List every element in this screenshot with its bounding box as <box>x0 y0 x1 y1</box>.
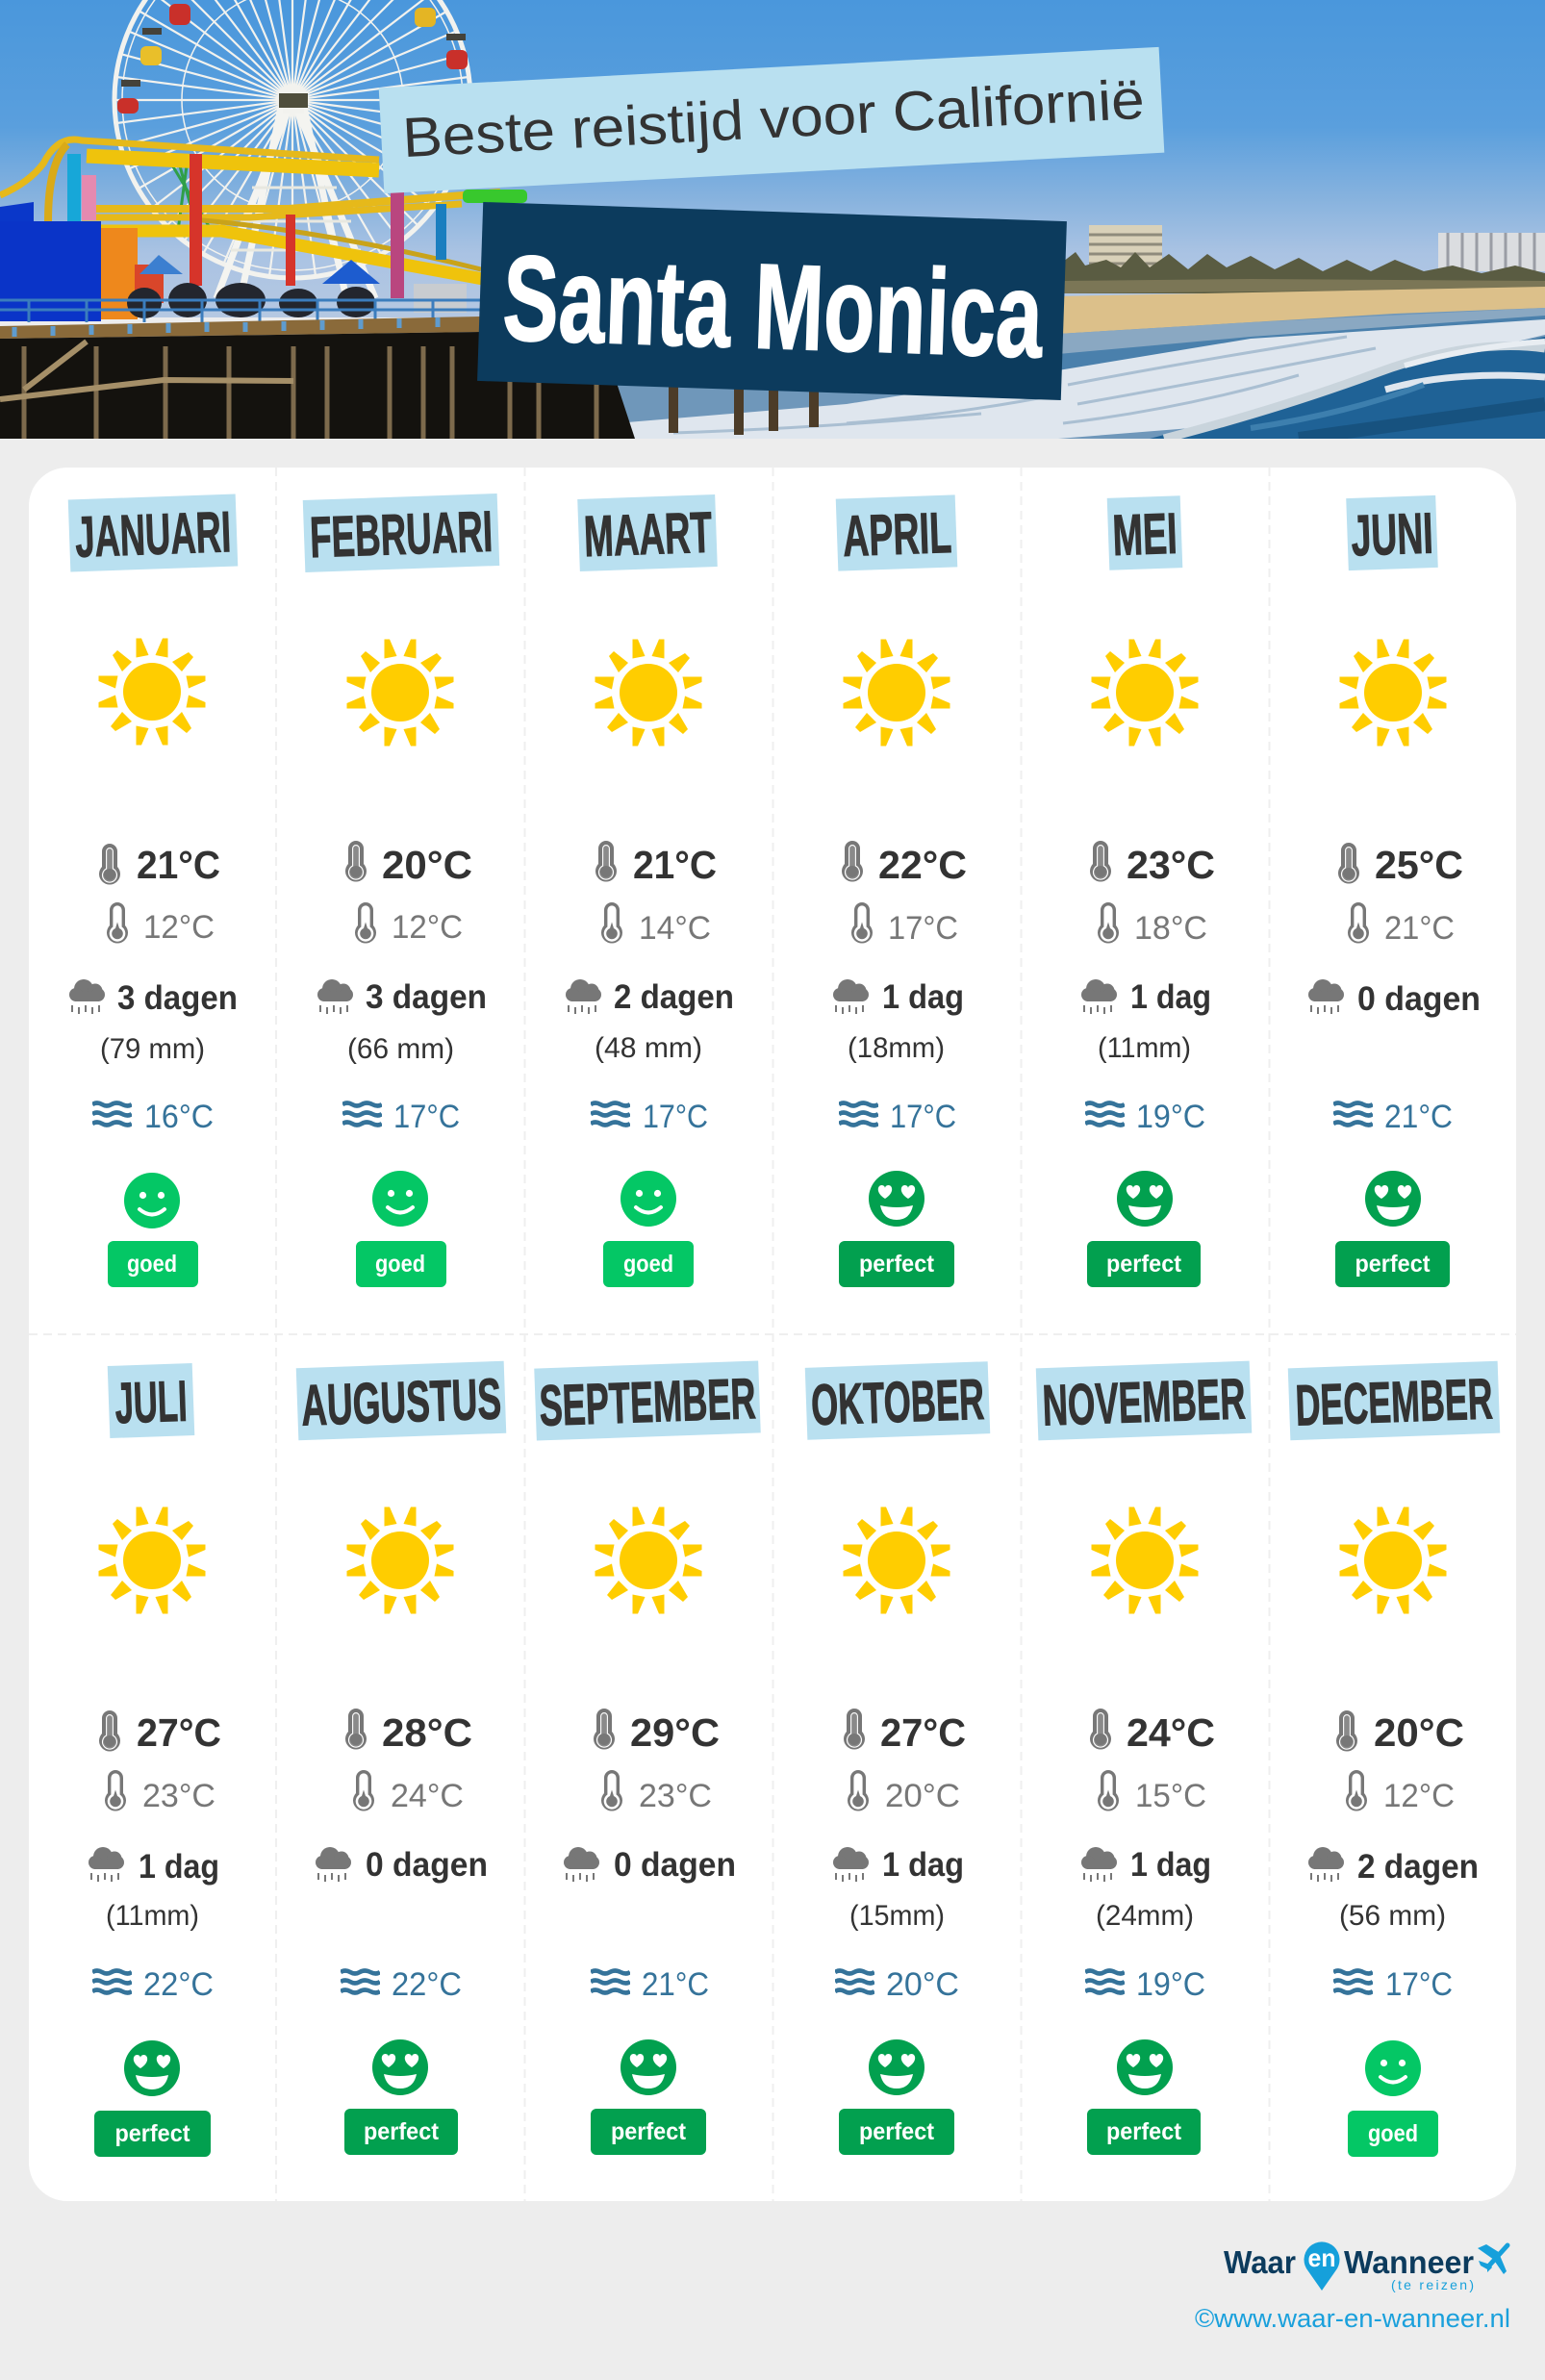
water temperature: 16°C <box>144 1099 214 1135</box>
rating badge: perfect <box>859 2118 935 2145</box>
month label: NOVEMBER <box>1041 1366 1247 1438</box>
max temperature: 20°C <box>382 843 472 887</box>
water temperature: 19°C <box>1136 1099 1205 1135</box>
month label <box>1107 495 1182 570</box>
month label: MEI <box>1111 501 1178 568</box>
min temperature: 12°C <box>392 909 463 946</box>
rating badge: goed <box>127 1251 177 1278</box>
rain days: 1 dag <box>882 1846 964 1884</box>
column: mei <box>1081 495 1215 1287</box>
header photo: Santa Monica pier and beach <box>0 0 1545 439</box>
column: februari <box>303 494 499 1287</box>
icon: sun <box>1339 1506 1447 1614</box>
rating badge <box>344 2109 458 2155</box>
icon: waves <box>92 1102 132 1126</box>
water temperature: 22°C <box>392 1966 462 2003</box>
icon: thermometer high <box>1338 843 1359 884</box>
icon: rain cloud <box>1081 1847 1117 1882</box>
rainfall: (66 mm) <box>347 1033 454 1065</box>
column: januari <box>68 494 238 1287</box>
column: maart <box>566 494 734 1287</box>
water temperature: 21°C <box>1384 1099 1453 1135</box>
rating badge: perfect <box>1355 1251 1431 1278</box>
rating badge: perfect <box>115 2120 190 2147</box>
min temperature: 12°C <box>1383 1778 1455 1814</box>
icon: waves <box>1085 1970 1125 1993</box>
icon: sun <box>843 639 950 747</box>
icon: waves <box>1333 1102 1373 1126</box>
rating badge <box>591 2109 706 2155</box>
icon: smiley perfect <box>372 2039 428 2095</box>
min temperature: 17°C <box>888 910 958 947</box>
icon: thermometer low <box>601 902 622 944</box>
icon: smiley good <box>1365 2040 1421 2096</box>
month label <box>296 1361 506 1440</box>
rating badge <box>603 1241 694 1287</box>
water temperature: 17°C <box>393 1099 460 1135</box>
min temperature: 20°C <box>885 1778 960 1814</box>
title banner <box>477 202 1067 400</box>
icon: sun <box>595 639 702 747</box>
logo: Waar en Wanneer: en <box>1308 2243 1335 2272</box>
icon: thermometer low <box>601 1770 622 1811</box>
icon: smiley perfect <box>124 2040 180 2096</box>
icon: rain cloud <box>566 979 601 1014</box>
min temperature: 23°C <box>142 1778 215 1814</box>
water temperature: 22°C <box>143 1966 214 2003</box>
icon: waves <box>591 1970 630 1993</box>
month label: JUNI <box>1350 501 1434 568</box>
water temperature: 20°C <box>886 1966 959 2003</box>
subtitle banner <box>379 47 1164 193</box>
logo: Waar en Wanneer: Wanneer <box>1344 2244 1474 2280</box>
month label <box>577 494 718 571</box>
column: december <box>1288 1361 1500 2157</box>
icon: map pin <box>1304 2241 1339 2291</box>
icon: thermometer low <box>1098 1770 1119 1811</box>
icon: thermometer high <box>1336 1710 1357 1752</box>
icon: thermometer low <box>1348 902 1369 944</box>
rating badge: goed <box>623 1251 673 1278</box>
website credit: ©www.waar-en-wanneer.nl <box>1195 2304 1510 2333</box>
rainfall: (48 mm) <box>595 1032 702 1064</box>
icon: smiley perfect <box>1365 1171 1421 1227</box>
rating badge <box>839 1241 954 1287</box>
icon: rain cloud <box>564 1847 599 1882</box>
rating badge <box>1087 1241 1201 1287</box>
rating badge: perfect <box>1106 2118 1182 2145</box>
water temperature: 17°C <box>643 1099 708 1135</box>
month label: OKTOBER <box>810 1367 985 1437</box>
min temperature: 15°C <box>1135 1778 1206 1814</box>
month label: APRIL <box>842 500 952 569</box>
icon: smiley good <box>372 1171 428 1227</box>
icon: thermometer low <box>848 1770 869 1811</box>
month label <box>805 1361 990 1440</box>
icon: sun <box>1339 639 1447 747</box>
icon: thermometer high <box>345 841 367 882</box>
icon: waves <box>341 1970 380 1993</box>
icon: waves <box>835 1970 874 1993</box>
panel: climate table <box>29 468 1516 2201</box>
icon: thermometer high <box>842 841 863 882</box>
column: juli <box>89 1363 221 2157</box>
column: april <box>833 494 967 1287</box>
max temperature: 23°C <box>1127 843 1215 887</box>
icon: rain cloud <box>69 979 105 1014</box>
rainfall: (79 mm) <box>100 1033 205 1065</box>
min temperature: 23°C <box>639 1778 712 1814</box>
icon: waves <box>92 1970 132 1993</box>
max temperature: 29°C <box>630 1710 720 1755</box>
icon: rain cloud <box>317 979 353 1014</box>
rating badge: perfect <box>1106 1251 1182 1278</box>
icon: thermometer low <box>107 902 128 944</box>
icon: waves <box>342 1102 382 1126</box>
rainfall: (11mm) <box>106 1900 199 1932</box>
rating badge <box>108 1241 198 1287</box>
rating badge: perfect <box>611 2118 687 2145</box>
column: oktober <box>805 1361 990 2155</box>
month label <box>108 1363 194 1438</box>
month label: MAART <box>583 500 713 569</box>
water temperature: 17°C <box>890 1099 956 1135</box>
rainfall: (24mm) <box>1096 1900 1194 1932</box>
month label <box>534 1360 761 1441</box>
rain days: 2 dagen <box>614 978 734 1016</box>
month label: SEPTEMBER <box>538 1366 757 1438</box>
water temperature: 19°C <box>1136 1966 1205 2003</box>
icon: thermometer high <box>1090 1709 1111 1750</box>
rides: roller coaster and coloured poles <box>0 139 527 321</box>
icon: thermometer high <box>595 841 617 882</box>
rain days: 1 dag <box>1130 1846 1211 1884</box>
icon: thermometer high <box>844 1709 865 1750</box>
icon: rain cloud <box>316 1847 351 1882</box>
icon: sun <box>843 1506 950 1614</box>
icon: rain cloud <box>1081 979 1117 1014</box>
icon: thermometer high <box>99 844 120 885</box>
rating badge <box>1335 1241 1450 1287</box>
ferris wheel <box>114 0 470 298</box>
rain days: 3 dagen <box>366 978 487 1016</box>
icon: smiley good <box>124 1173 180 1228</box>
icon: thermometer high <box>345 1709 367 1750</box>
rating badge: goed <box>375 1251 425 1278</box>
rain days: 1 dag <box>139 1848 219 1886</box>
rating badge: perfect <box>859 1251 935 1278</box>
water temperature: 17°C <box>1385 1966 1453 2003</box>
icon: waves <box>591 1102 630 1126</box>
icon: sun <box>346 1506 454 1614</box>
rating badge: goed <box>1368 2120 1418 2147</box>
rainfall: (56 mm) <box>1339 1900 1446 1932</box>
month label <box>303 494 499 572</box>
icon: rain cloud <box>833 979 869 1014</box>
title banner: Santa Monica <box>501 230 1046 383</box>
max temperature: 21°C <box>137 843 220 887</box>
subtitle banner: Beste reistijd voor Californië <box>401 68 1146 169</box>
rating badge: perfect <box>364 2118 440 2145</box>
icon: thermometer high <box>594 1709 615 1750</box>
water temperature: 21°C <box>642 1966 709 2003</box>
min temperature: 24°C <box>391 1778 464 1814</box>
column: september <box>534 1360 761 2155</box>
icon: thermometer high <box>1090 841 1111 882</box>
month label: JANUARI <box>74 499 232 570</box>
month label: FEBRUARI <box>309 499 494 570</box>
icon: thermometer low <box>851 902 873 944</box>
rating badge <box>1087 2109 1201 2155</box>
icon: thermometer high <box>99 1710 120 1752</box>
rating badge <box>94 2111 211 2157</box>
month label <box>1346 495 1438 570</box>
rating badge <box>356 1241 446 1287</box>
max temperature: 27°C <box>137 1710 221 1755</box>
icon: thermometer low <box>1098 902 1119 944</box>
rainfall: (18mm) <box>848 1032 945 1064</box>
rainfall: (15mm) <box>849 1900 945 1932</box>
icon: thermometer low <box>353 1770 374 1811</box>
max temperature: 27°C <box>880 1710 966 1755</box>
month label: AUGUSTUS <box>300 1366 502 1438</box>
column: november <box>1036 1361 1252 2155</box>
rain days: 0 dagen <box>1357 980 1481 1018</box>
column: augustus <box>296 1361 506 2155</box>
pier deck, crowd and pilings <box>0 283 814 439</box>
month label <box>836 494 957 571</box>
rain days: 3 dagen <box>117 979 238 1017</box>
logo: Waar en Wanneer: (te reizen) <box>1391 2277 1474 2292</box>
icon: sun <box>98 639 206 745</box>
min temperature: 21°C <box>1384 910 1455 947</box>
icon: smiley perfect <box>621 2039 676 2095</box>
icon: smiley perfect <box>1117 2039 1173 2095</box>
icon: sun <box>595 1506 702 1614</box>
icon: waves <box>1085 1102 1125 1126</box>
min temperature: 12°C <box>143 909 215 946</box>
icon: airplane <box>1478 2244 1507 2274</box>
rain days: 2 dagen <box>1357 1848 1479 1886</box>
column: juni <box>1308 495 1481 1287</box>
icon: rain cloud <box>89 1847 124 1882</box>
icon: sun <box>346 639 454 747</box>
max temperature: 28°C <box>382 1710 472 1755</box>
icon: rain cloud <box>1308 1847 1344 1882</box>
icon: waves <box>839 1102 878 1126</box>
month label: JULI <box>114 1369 189 1435</box>
max temperature: 22°C <box>878 843 967 887</box>
icon: smiley good <box>621 1171 676 1227</box>
rain days: 1 dag <box>882 978 964 1016</box>
icon: thermometer low <box>1346 1770 1367 1811</box>
icon: rain cloud <box>1308 979 1344 1014</box>
rain days: 1 dag <box>1130 978 1211 1016</box>
icon: rain cloud <box>833 1847 869 1882</box>
min temperature: 18°C <box>1134 910 1207 947</box>
icon: smiley perfect <box>869 2039 924 2095</box>
max temperature: 24°C <box>1127 1710 1215 1755</box>
rating badge <box>839 2109 954 2155</box>
icon: smiley perfect <box>1117 1171 1173 1227</box>
max temperature: 25°C <box>1375 843 1463 887</box>
rain days: 0 dagen <box>366 1846 488 1884</box>
logo: Waar en Wanneer <box>1224 2241 1507 2292</box>
logo: Waar en Wanneer: Waar <box>1224 2244 1296 2280</box>
rainfall: (11mm) <box>1098 1032 1191 1064</box>
icon: sun <box>1091 1506 1199 1614</box>
month label <box>1036 1361 1252 1440</box>
icon: thermometer low <box>355 902 376 944</box>
icon: sun <box>1091 639 1199 747</box>
min temperature: 14°C <box>639 910 711 947</box>
icon: sun <box>98 1506 206 1614</box>
month label <box>68 494 238 572</box>
icon: smiley perfect <box>869 1171 924 1227</box>
max temperature: 20°C <box>1374 1710 1464 1755</box>
rain days: 0 dagen <box>614 1846 736 1884</box>
max temperature: 21°C <box>633 843 717 887</box>
icon: waves <box>1333 1970 1373 1993</box>
rating badge <box>1348 2111 1438 2157</box>
icon: thermometer low <box>105 1770 126 1811</box>
